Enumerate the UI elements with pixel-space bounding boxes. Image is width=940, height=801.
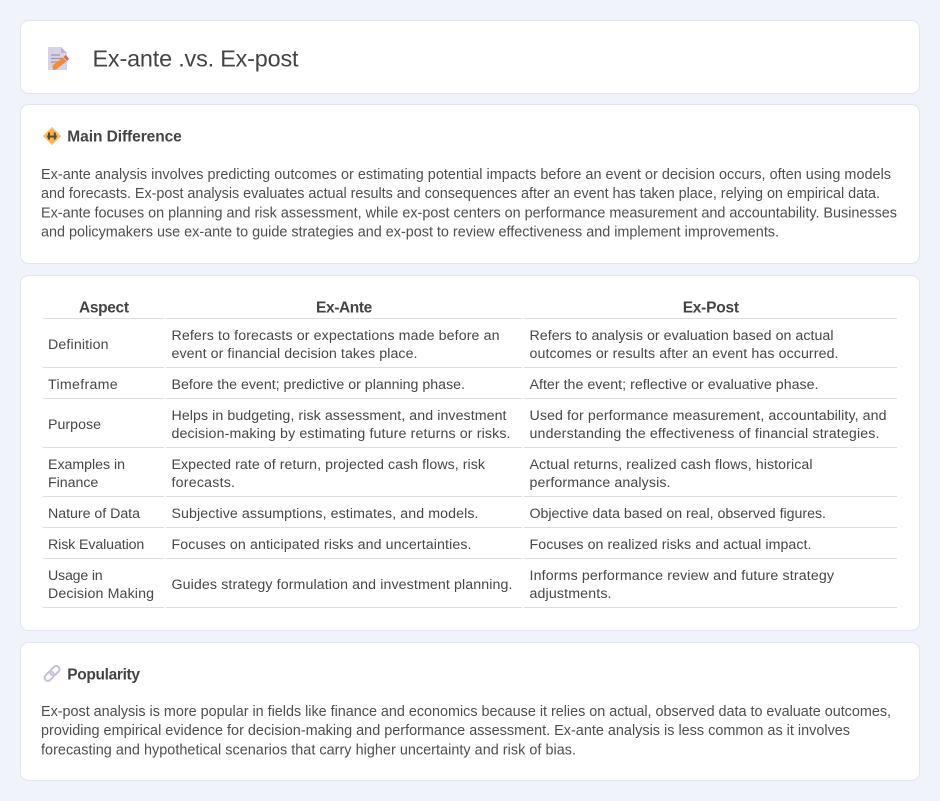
- row: timeframe: [48, 377, 818, 393]
- row: purpose: decision-making by estimating future returns or risks.: [172, 426, 510, 442]
- panel: main difference: [20, 104, 920, 264]
- icon: document with pencil: [48, 47, 69, 70]
- row: purpose: Helps in budgeting, risk assessment, and investment: [172, 408, 507, 424]
- icon: chain link: [43, 665, 61, 682]
- row: definition: Refers to forecasts or expectations made before an: [172, 328, 500, 344]
- row: usage in decision making: Guides strategy formulation and investment planning.: [172, 577, 512, 593]
- row: examples in finance: Finance: [48, 475, 98, 491]
- icon: warning diamond: [44, 128, 60, 144]
- table header row: Ex-Post: [683, 300, 739, 317]
- row: risk evaluation: Focuses on realized risks and actual impact.: [530, 537, 812, 553]
- row: purpose: understanding the effectiveness of financial strategies.: [530, 426, 880, 442]
- row: purpose: Used for performance measurement, accountability, and: [530, 408, 886, 424]
- row: definition: Definition: [48, 337, 108, 353]
- row: nature of data: Nature of Data: [48, 506, 140, 522]
- row: risk evaluation: Risk Evaluation: [48, 537, 144, 553]
- text block: popularity paragraph: Ex-post analysis is more popular in fields like finance and economics because it relies on actual, observed data to evaluate outcomes,: [41, 704, 891, 720]
- row: definition: event or financial decision takes place.: [172, 346, 418, 362]
- row: usage in decision making: [48, 568, 835, 602]
- row: timeframe: Timeframe: [48, 377, 118, 393]
- text block: main difference paragraph: Ex-ante analysis involves predicting outcomes or estimating potential impacts before an event or decision occurs, often using models: [41, 167, 891, 183]
- panel: popularity: [20, 642, 920, 780]
- row: examples in finance: [48, 457, 812, 491]
- row: usage in decision making: Informs performance review and future strategy: [530, 568, 835, 584]
- text block: main difference paragraph: [41, 167, 897, 241]
- row: nature of data: Objective data based on real, observed figures.: [530, 506, 826, 522]
- text block: popularity paragraph: [41, 704, 891, 758]
- panel: title header: [20, 20, 920, 94]
- text block: main difference paragraph: Ex-ante focuses on planning and risk assessment, while ex-post centers on performance measurement and accountability. Businesses: [41, 205, 897, 221]
- row: examples in finance: performance analysis.: [530, 475, 670, 491]
- row: definition: [48, 328, 838, 362]
- row: timeframe: After the event; reflective or evaluative phase.: [530, 377, 818, 393]
- row: risk evaluation: [48, 537, 812, 553]
- row: examples in finance: forecasts.: [172, 475, 235, 491]
- text block: main difference paragraph: and policymakers use ex-ante to guide strategies and ex-post to review effectiveness and implement improvements.: [41, 225, 779, 241]
- text block: main difference paragraph: and forecasts. Ex-post analysis evaluates actual results and consequences after an event has taken place, relying on empirical data.: [41, 186, 880, 202]
- row: usage in decision making: Usage in: [48, 568, 103, 584]
- row: purpose: [48, 408, 886, 442]
- table header row: Ex-Ante: [316, 300, 373, 317]
- title: Ex-ante .vs. Ex-post: [92, 46, 299, 72]
- panel: comparison table: [20, 276, 920, 630]
- row: examples in finance: Examples in: [48, 457, 125, 473]
- row: risk evaluation: Focuses on anticipated risks and uncertainties.: [172, 537, 472, 553]
- table header row: [79, 300, 739, 317]
- row: purpose: Purpose: [48, 417, 101, 433]
- row: nature of data: [48, 506, 826, 522]
- row: nature of data: Subjective assumptions, estimates, and models.: [172, 506, 478, 522]
- row: timeframe: Before the event; predictive or planning phase.: [172, 377, 465, 393]
- text block: popularity paragraph: providing empirical evidence for decision-making and performance assessment. Ex-ante analysis is less common as it involves: [41, 723, 850, 739]
- text block: popularity paragraph: forecasting and hypothetical scenarios that carry higher uncertainty and risk of bias.: [41, 742, 576, 758]
- heading: main difference: Main Difference: [67, 129, 182, 146]
- row: definition: outcomes or results after an event has occurred.: [530, 346, 838, 362]
- row: usage in decision making: adjustments.: [530, 586, 612, 602]
- table header row: Aspect: [79, 300, 129, 317]
- row: examples in finance: Actual returns, realized cash flows, historical: [530, 457, 812, 473]
- row: examples in finance: Expected rate of return, projected cash flows, risk: [172, 457, 486, 473]
- row: definition: Refers to analysis or evaluation based on actual: [530, 328, 834, 344]
- heading: popularity: Popularity: [67, 666, 140, 683]
- row: usage in decision making: Decision Making: [48, 586, 154, 602]
